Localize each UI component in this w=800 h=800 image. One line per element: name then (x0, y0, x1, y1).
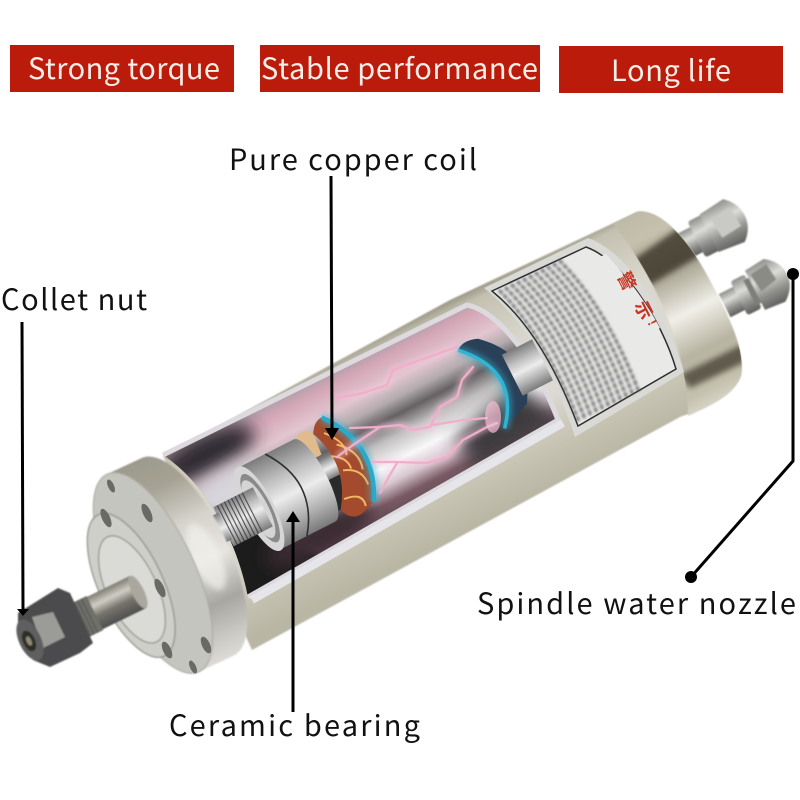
flange (69, 501, 193, 670)
label: ceramic bearing: Ceramic bearing (169, 703, 420, 745)
arrow: pure copper coil (325, 176, 339, 440)
plate heading: 警 (612, 267, 643, 295)
copper coil (290, 408, 388, 527)
cutaway window (147, 305, 568, 600)
plate text lines (499, 260, 639, 422)
threads (201, 487, 273, 553)
label: collet nut: Collet nut (1, 277, 147, 319)
arrow: ceramic bearing (286, 511, 300, 712)
banner: long life: Long life (611, 48, 731, 90)
tool shaft (60, 572, 152, 643)
banner: long life (559, 46, 783, 93)
ceramic bearing (225, 433, 347, 557)
banner: strong torque: Strong torque (28, 46, 220, 88)
ring highlight (178, 518, 234, 596)
plate heading: ！ (643, 316, 664, 335)
spindle illustration (11, 194, 798, 696)
icon: upper water nozzle (666, 194, 755, 271)
icon: collet nut (11, 588, 93, 667)
label: pure copper coil: Pure copper coil (229, 137, 477, 179)
banner: stable performance: Stable performance (261, 46, 538, 88)
warning plate (484, 238, 684, 437)
arrow: collet nut (17, 322, 29, 616)
dark left shading (166, 414, 268, 490)
plate heading: 示 (629, 296, 660, 324)
light left band (190, 448, 263, 514)
label: spindle water nozzle: Spindle water nozzle (477, 581, 796, 623)
window bevel (163, 305, 558, 597)
dark lower-left shading (215, 510, 330, 600)
polished rear section (613, 212, 745, 416)
spindle body (163, 212, 742, 650)
arrow: spindle water nozzle (685, 268, 799, 583)
lightning glow (337, 347, 497, 463)
front ring and face (55, 440, 272, 696)
hub (85, 526, 179, 653)
plate heading cover (590, 254, 660, 340)
icon: lower water nozzle (714, 253, 798, 327)
plate heading (612, 267, 664, 335)
internals (186, 315, 568, 579)
bolt holes (98, 478, 213, 675)
dark right corner (455, 385, 565, 470)
right coil (456, 315, 563, 431)
face (69, 456, 237, 690)
lightning arcs (337, 347, 501, 493)
shaft and dark rotor end (305, 449, 351, 487)
